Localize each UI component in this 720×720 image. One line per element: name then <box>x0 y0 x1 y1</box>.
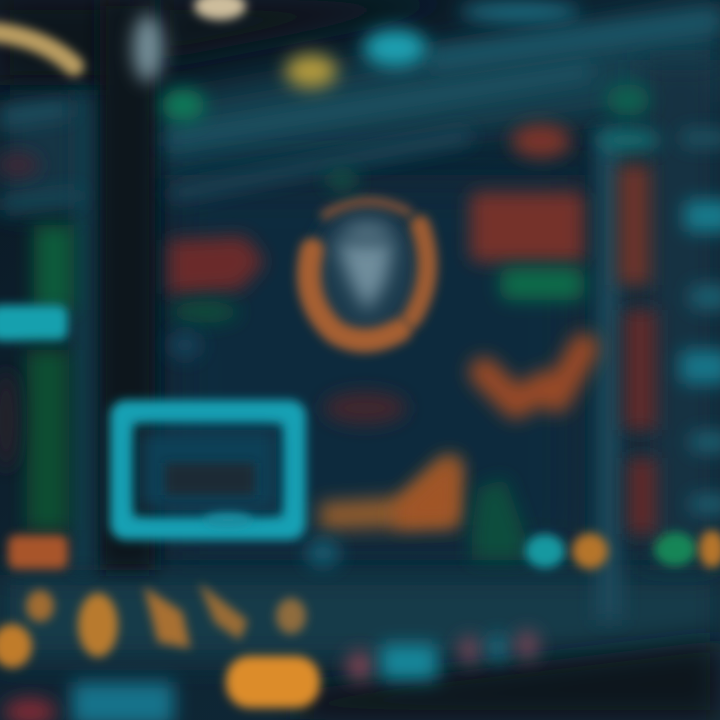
icon: top left tan curve <box>0 32 74 66</box>
right vertical red bars <box>618 165 656 534</box>
orange area chart <box>320 455 460 530</box>
bottom legend chips <box>4 630 539 720</box>
orange pill <box>226 656 320 708</box>
left red and green labels <box>168 236 265 359</box>
bottom orange blobs <box>0 590 306 668</box>
cyan framed panel <box>122 412 294 528</box>
left column bars <box>0 153 74 569</box>
right red and green blocks <box>470 124 584 300</box>
dark red text line <box>323 391 407 425</box>
right cyan bars <box>680 130 720 513</box>
faint diagonal streaks <box>0 20 720 205</box>
icon: top white blob <box>194 0 246 20</box>
top colour chips <box>161 2 660 152</box>
bottom row chips <box>306 530 720 569</box>
icon: orange zigzag <box>484 348 584 404</box>
green chart <box>472 478 525 560</box>
icon: grey vertical blob <box>133 14 163 82</box>
central orange ring icon <box>309 171 427 341</box>
